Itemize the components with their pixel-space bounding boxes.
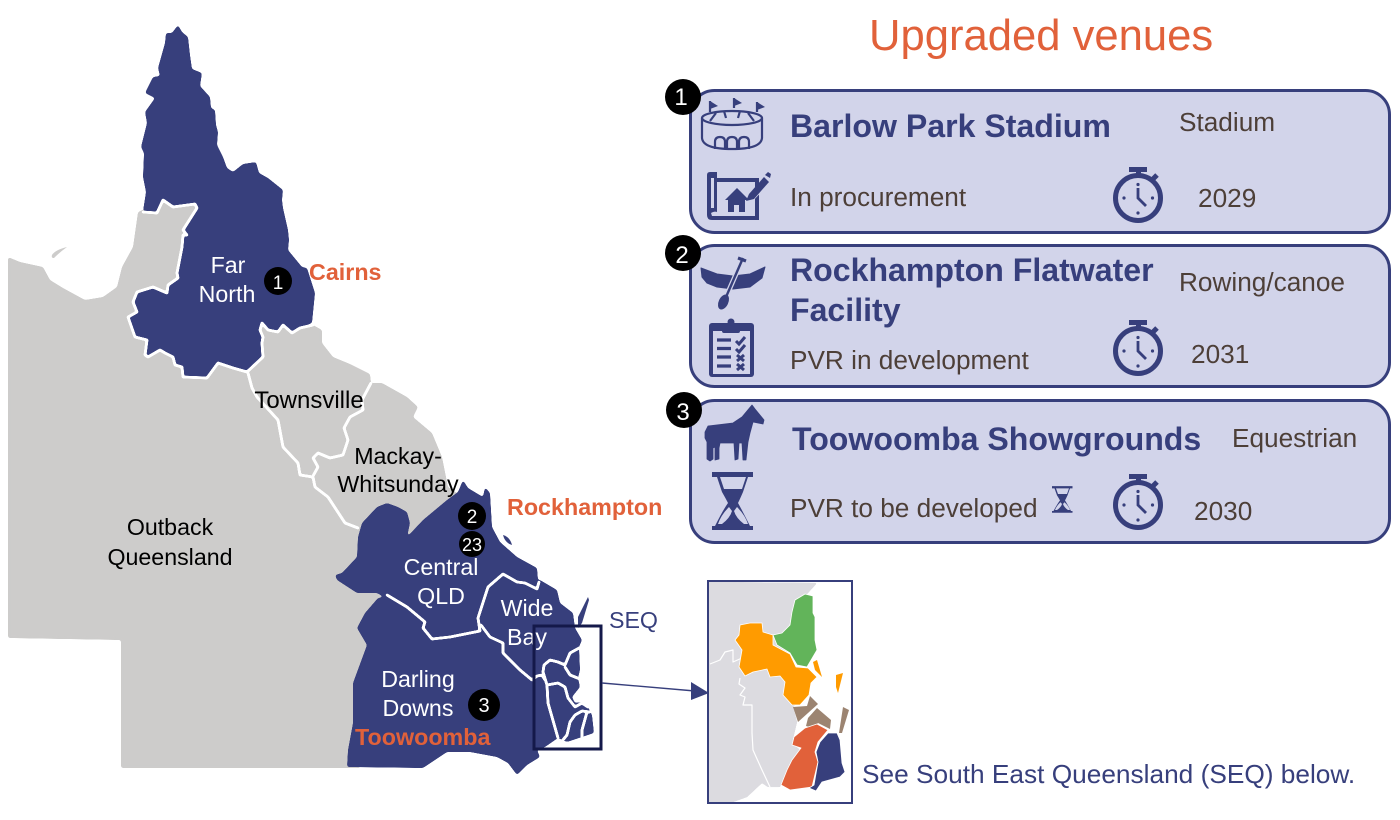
- inset region: red-orange: [781, 724, 828, 790]
- heading: Rockhampton Flatwater: [790, 252, 1154, 288]
- map marker: 3: [468, 689, 500, 721]
- label: Cairns: Cairns: [309, 259, 382, 285]
- icon: hourglass: [712, 472, 753, 530]
- boundary lines within the south: [387, 574, 539, 639]
- label: Rockhampton: Rockhampton: [507, 494, 662, 520]
- map marker: 23: 23: [462, 535, 482, 555]
- inset frame: [708, 581, 852, 803]
- inset caption: See South East Queensland (SEQ) below.: [862, 759, 1355, 789]
- map marker: 2: 2: [467, 507, 477, 528]
- label: Outback Queensland: Outback: [127, 514, 214, 540]
- title: Upgraded venues: [869, 12, 1213, 60]
- panel: Rockhampton Flatwater Facility: [665, 235, 1390, 386]
- island: Curtis Island: [503, 535, 512, 545]
- inset region: orange: [735, 623, 817, 705]
- year: 2029: [1198, 183, 1256, 213]
- heading: Barlow Park Stadium: [790, 108, 1111, 144]
- map labels: Downs: [383, 695, 453, 721]
- map labels: North: [199, 281, 255, 307]
- island: grey gulf island: [52, 247, 67, 258]
- map marker: 1: [264, 267, 292, 295]
- sport: Stadium: [1179, 107, 1275, 137]
- icon: canoe and paddle: [701, 258, 765, 311]
- inset region: navy: [809, 733, 845, 791]
- map: Queensland regions: [8, 25, 594, 775]
- icon: horse: [705, 405, 764, 461]
- year: 2030: [1194, 496, 1252, 526]
- inset region: green: [773, 594, 817, 667]
- map marker: 1: 1: [273, 273, 283, 294]
- inset boundaries: [710, 650, 770, 787]
- status: In procurement: [790, 182, 967, 212]
- map labels: QLD: [417, 583, 465, 609]
- inset islands: orange: [813, 660, 843, 693]
- number badge: [665, 235, 701, 271]
- label: Wide Bay: Wide: [501, 595, 553, 621]
- region boundary lines: [248, 373, 358, 528]
- sport: Equestrian: [1232, 423, 1357, 453]
- region: Outback, Townsville and Mackay grey land: [8, 200, 470, 768]
- icon: small hourglass: [1052, 486, 1072, 513]
- map labels: [107, 252, 662, 750]
- number badge: 3: [676, 399, 690, 426]
- label: Darling Downs: Darling: [381, 666, 455, 692]
- regions: Central QLD, Wide Bay, Darling Downs and South East: [335, 480, 594, 775]
- label: Toowoomba: Toowoomba: [355, 724, 491, 750]
- status: PVR in development: [790, 345, 1029, 375]
- status: PVR to be developed: [790, 493, 1038, 523]
- label: Townsville: Townsville: [254, 387, 364, 414]
- icon: blueprint and pencil: [707, 172, 772, 220]
- island: Fraser Island: [578, 597, 589, 628]
- icon: stopwatch: [1116, 167, 1160, 220]
- inset map: South East Queensland: [708, 581, 852, 803]
- map marker: 23: [459, 531, 485, 557]
- label: Far North: Far: [211, 252, 246, 278]
- panel: Rockhampton Flatwater Facility: Facility: [790, 292, 901, 328]
- number badge: 1: [674, 84, 688, 111]
- inset land: [708, 582, 817, 802]
- map labels: Queensland: [107, 544, 233, 570]
- map marker: 2: [458, 502, 486, 530]
- icon: stopwatch: [1116, 474, 1160, 528]
- icon: stopwatch: [1116, 320, 1160, 374]
- number badge: 2: [675, 242, 689, 269]
- year: 2031: [1191, 339, 1249, 369]
- SEQ highlight box: [534, 626, 601, 749]
- map marker: 3: 3: [478, 695, 490, 717]
- inset regions: brown: [793, 696, 849, 733]
- arrow to inset: [602, 682, 709, 700]
- label: Central QLD: Central: [404, 554, 478, 580]
- icon: clipboard checklist: [709, 318, 754, 377]
- label: SEQ: SEQ: [609, 607, 658, 633]
- label: Mackay-Whitsunday: Mackay-: [354, 443, 442, 469]
- panel: Barlow Park Stadium: [665, 79, 1390, 232]
- map labels: Whitsunday: [337, 471, 459, 497]
- panel: Toowoomba Showgrounds: [666, 392, 1390, 542]
- Far North west and south white edge: [128, 200, 313, 378]
- heading: Toowoomba Showgrounds: [792, 421, 1201, 457]
- sport: Rowing/canoe: [1179, 267, 1345, 297]
- region: Far North: [128, 25, 315, 378]
- map labels: Bay: [507, 624, 547, 650]
- icon: stadium: [702, 98, 765, 149]
- number badge: [665, 79, 701, 115]
- number badge: [666, 392, 702, 428]
